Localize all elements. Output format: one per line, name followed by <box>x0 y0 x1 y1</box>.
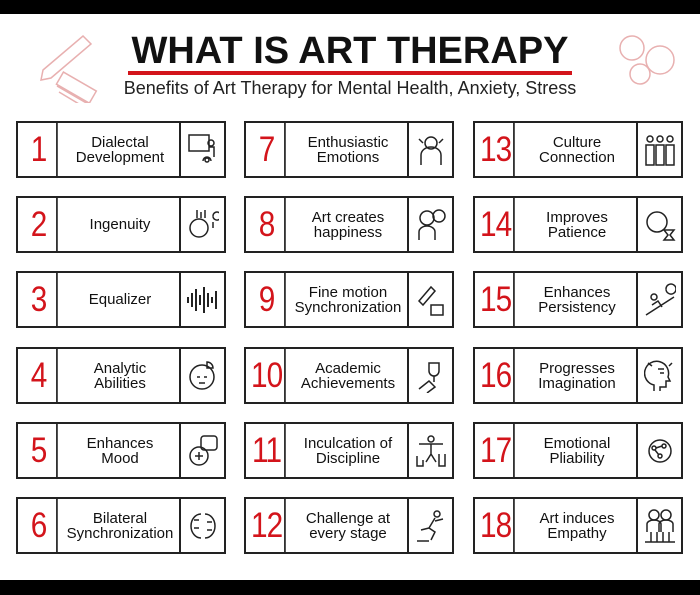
card 4: 4 <box>31 356 46 394</box>
card 10: 10 <box>251 356 282 394</box>
card 11: 11 <box>252 430 281 470</box>
card 11: Inculcation of <box>304 434 392 452</box>
title: WHAT IS ART THERAPY <box>132 30 568 72</box>
card 14: Improves <box>546 208 608 226</box>
card 1: Development <box>76 148 164 166</box>
card 17: 17 <box>480 430 511 470</box>
card 7: Emotions <box>317 148 379 166</box>
card 4 <box>16 347 226 404</box>
card 18: 18 <box>480 506 511 544</box>
card 14: 14 <box>480 204 511 244</box>
card 1: 1 <box>31 130 46 168</box>
card 17 <box>473 422 683 479</box>
card 17: Emotional <box>544 434 610 452</box>
card 5: Enhances <box>87 434 153 452</box>
card 7 <box>244 121 454 178</box>
card 13: Culture <box>553 134 601 150</box>
card 6: Bilateral <box>93 510 147 526</box>
card 4: Analytic <box>94 360 146 376</box>
bottom bar <box>0 580 700 595</box>
card 5: Mood <box>101 450 139 466</box>
card 2: Ingenuity <box>90 216 150 233</box>
card 14 <box>473 196 683 253</box>
card 10 <box>244 347 454 404</box>
decorative sketch: coins <box>619 35 675 85</box>
card 12 <box>244 497 454 554</box>
card 5: 5 <box>31 430 46 470</box>
card 7: 7 <box>259 130 274 168</box>
card 15: 15 <box>480 280 511 318</box>
card 6: 6 <box>31 506 46 544</box>
card 10: Achievements <box>301 374 395 392</box>
card 12: Challenge at <box>306 510 390 526</box>
card 8 <box>244 196 454 253</box>
card 12: every stage <box>309 524 387 542</box>
card 4: Abilities <box>94 374 146 392</box>
card 1 <box>16 121 226 178</box>
card 16: Progresses <box>539 360 615 376</box>
card 17: Pliability <box>549 450 604 466</box>
card 3 <box>16 271 226 328</box>
card 9: Synchronization <box>295 298 401 316</box>
card 16 <box>473 347 683 404</box>
card 6: Synchronization <box>67 524 173 542</box>
card 11 <box>244 422 454 479</box>
card 9 <box>244 271 454 328</box>
card 8: Art creates <box>312 208 384 226</box>
card 13 <box>473 121 683 178</box>
card 13: Connection <box>539 148 615 166</box>
card 16: Imagination <box>538 374 616 392</box>
card 1: Dialectal <box>91 134 149 150</box>
card 8: 8 <box>259 204 274 244</box>
card 15: Persistency <box>538 298 616 316</box>
card 18: Empathy <box>547 524 607 542</box>
card 16: 16 <box>480 356 511 394</box>
card 3: Equalizer <box>89 291 151 308</box>
card 18: Art induces <box>539 510 615 526</box>
card 18 <box>473 497 683 554</box>
card 15 <box>473 271 683 328</box>
card 8: happiness <box>314 224 382 240</box>
top bar <box>0 0 700 14</box>
card 10: Academic <box>315 360 381 376</box>
subtitle: Benefits of Art Therapy for Mental Health, Anxiety, Stress <box>124 78 576 98</box>
card 7: Enthusiastic <box>308 134 388 150</box>
title underline <box>128 71 572 75</box>
card 15: Enhances <box>544 284 610 300</box>
card 2: 2 <box>31 204 46 244</box>
card 9: Fine motion <box>309 284 387 300</box>
card 12: 12 <box>251 506 282 544</box>
card 13: 13 <box>480 130 511 168</box>
card 2 <box>16 196 226 253</box>
card 14: Patience <box>548 224 606 240</box>
card 5 <box>16 422 226 479</box>
card 3: 3 <box>31 280 46 318</box>
card 6 <box>16 497 226 554</box>
card 11: Discipline <box>316 450 380 466</box>
decorative sketch: pencil <box>40 35 98 103</box>
card 9: 9 <box>259 280 274 318</box>
